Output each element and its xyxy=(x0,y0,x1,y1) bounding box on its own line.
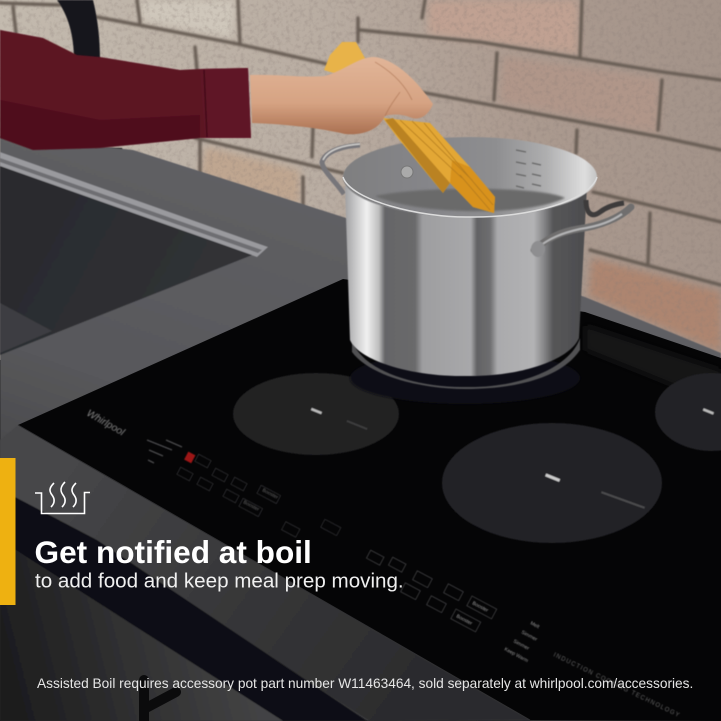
booster labels: Booster xyxy=(261,487,279,501)
zone labels xyxy=(503,620,541,664)
spaghetti top xyxy=(324,42,366,75)
booster labels: Booster xyxy=(455,613,473,627)
faucet xyxy=(57,0,127,178)
yellow accent bar xyxy=(0,458,16,605)
hand xyxy=(250,57,433,134)
arm sleeve xyxy=(0,30,251,150)
whirlpool logo: Whirlpool xyxy=(84,408,127,439)
booster labels: Booster xyxy=(242,499,260,513)
pot interior xyxy=(343,137,597,217)
burner: front left xyxy=(233,373,399,455)
pot xyxy=(322,137,631,389)
right handle xyxy=(531,200,631,257)
left panel labels xyxy=(147,440,182,463)
water surface xyxy=(375,189,565,211)
cabinet handle xyxy=(144,680,176,721)
sink xyxy=(0,152,268,355)
counter strips below cooktop xyxy=(0,425,530,721)
booster labels xyxy=(242,487,489,627)
inner rivet xyxy=(401,166,413,178)
brick wall xyxy=(0,0,721,360)
rim highlight xyxy=(343,177,597,217)
technology label: INDUCTION COOKING TECHNOLOGY xyxy=(552,652,681,719)
zone labels: Simmer xyxy=(520,629,538,643)
left control panel xyxy=(177,454,341,537)
left handle xyxy=(322,144,360,194)
burner under pot xyxy=(350,352,580,404)
measurement markings xyxy=(516,150,541,188)
subheading: to add food and keep meal prep moving. xyxy=(35,570,404,592)
booster labels: Booster xyxy=(471,600,489,614)
burner: rear right xyxy=(655,373,721,451)
pot base ring xyxy=(352,338,580,389)
cooktop reflection xyxy=(585,325,721,405)
zone labels: Keep Warm xyxy=(503,646,529,664)
cooktop xyxy=(18,279,721,721)
red indicator xyxy=(184,452,195,463)
icon: boiling pot xyxy=(35,482,90,514)
footnote: Assisted Boil requires accessory pot part number W11463464, sold separately at whirlpool.com/accessories. xyxy=(37,676,693,691)
zone labels: Simmer xyxy=(512,638,530,652)
right control panel xyxy=(366,550,497,632)
heading: Get notified at boil xyxy=(34,534,312,570)
pot body xyxy=(345,186,587,376)
zone labels: Melt xyxy=(529,620,541,630)
spaghetti bundle xyxy=(383,118,495,213)
burner: large xyxy=(442,423,662,543)
